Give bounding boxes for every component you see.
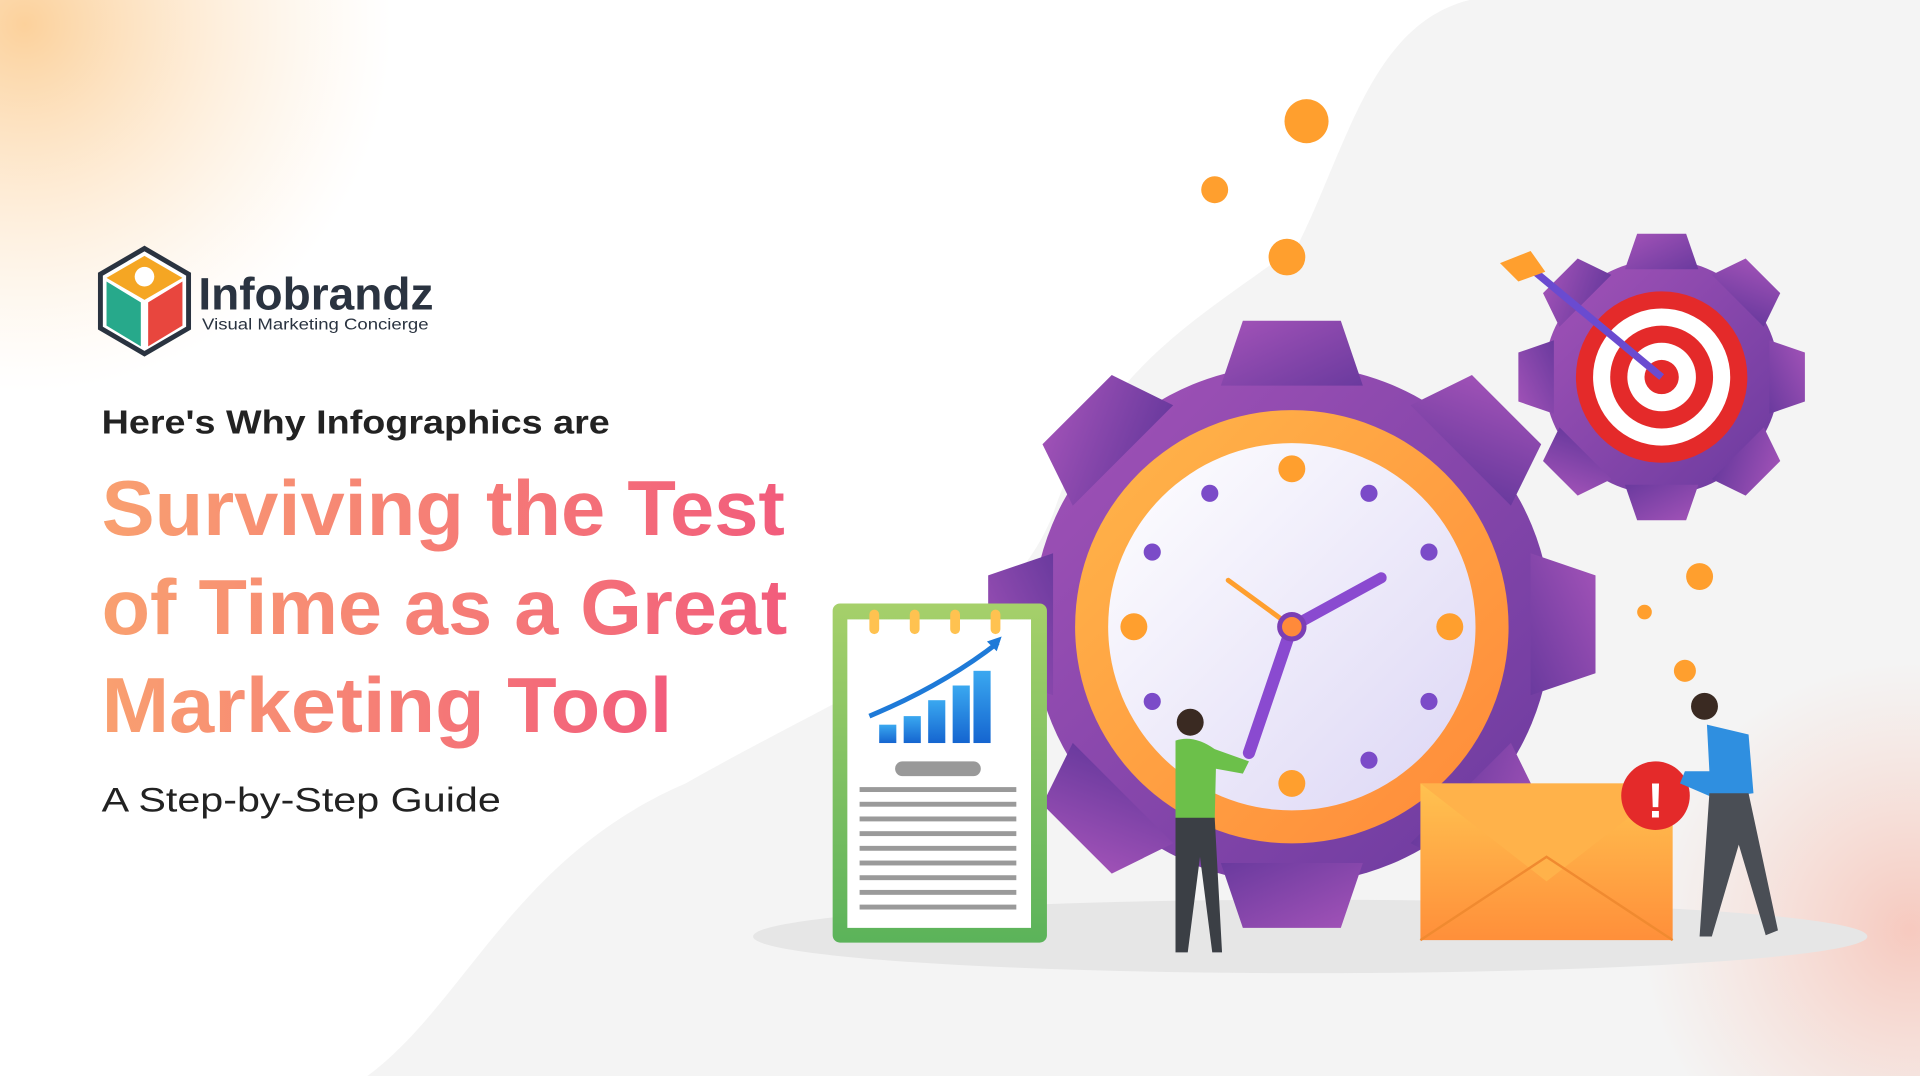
subtitle: Here's Why Infographics are <box>102 404 610 441</box>
title: Marketing Tool <box>102 661 672 749</box>
floor shadow <box>753 900 1867 973</box>
logo <box>100 248 433 354</box>
title <box>102 464 787 749</box>
big gear clock <box>988 321 1596 928</box>
guide text: A Step-by-Step Guide <box>102 782 501 820</box>
logo: Infobrandz <box>198 269 433 320</box>
envelope <box>1420 761 1690 940</box>
envelope: ! <box>1647 775 1664 829</box>
target gear <box>1500 234 1805 520</box>
person left <box>1176 709 1249 952</box>
logo: Visual Marketing Concierge <box>202 316 429 333</box>
title: Surviving the Test <box>102 464 785 552</box>
dots <box>1201 99 1713 682</box>
clipboard <box>833 603 1047 943</box>
person right <box>1680 693 1778 936</box>
title: of Time as a Great <box>102 563 787 651</box>
